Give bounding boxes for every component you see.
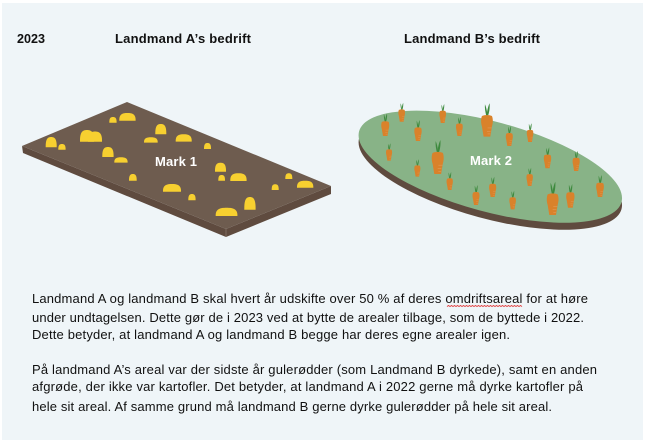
label: Mark 1: Mark 1 [155, 154, 197, 169]
potatoes [46, 113, 313, 216]
carrots [381, 103, 604, 215]
text block: paragraph 2: På landmand A’s areal var der sidste år gulerødder (som Landmand B dyrkede), samt en anden [32, 362, 597, 377]
text block: paragraph 1: Dette betyder, at landmand A og landmand B begge har deres egne arealer igen. [32, 327, 510, 342]
text block: paragraph 2 [32, 362, 597, 414]
field: Mark 2 carrot field [347, 88, 633, 253]
text block: paragraph 2: afgrøde, der ikke var kartofler. Det betyder, at landmand A i 2022 gerne må dyrke kartofler på [32, 379, 584, 394]
heading: Landmand A: Landmand A’s bedrift [115, 31, 252, 46]
text block: paragraph 1: under undtagelsen. Dette gør de i 2023 ved at bytte de arealer tilbage, som de byttede i 2022. [32, 310, 584, 325]
heading: year: 2023 [17, 31, 45, 46]
heading: Landmand B: Landmand B’s bedrift [404, 31, 541, 46]
text block: paragraph 1 [32, 291, 588, 342]
field: Mark 1 potato field [22, 102, 331, 237]
text block: paragraph 2: hele sit areal. Af samme grund må landmand B gerne dyrke gulerødder på hele sit areal. [32, 399, 552, 414]
label: Mark 2: Mark 2 [470, 153, 512, 168]
text block: paragraph 1: Landmand A og landmand B skal hvert år udskifte over 50 % af deres omdriftsareal for at høre [32, 291, 588, 306]
